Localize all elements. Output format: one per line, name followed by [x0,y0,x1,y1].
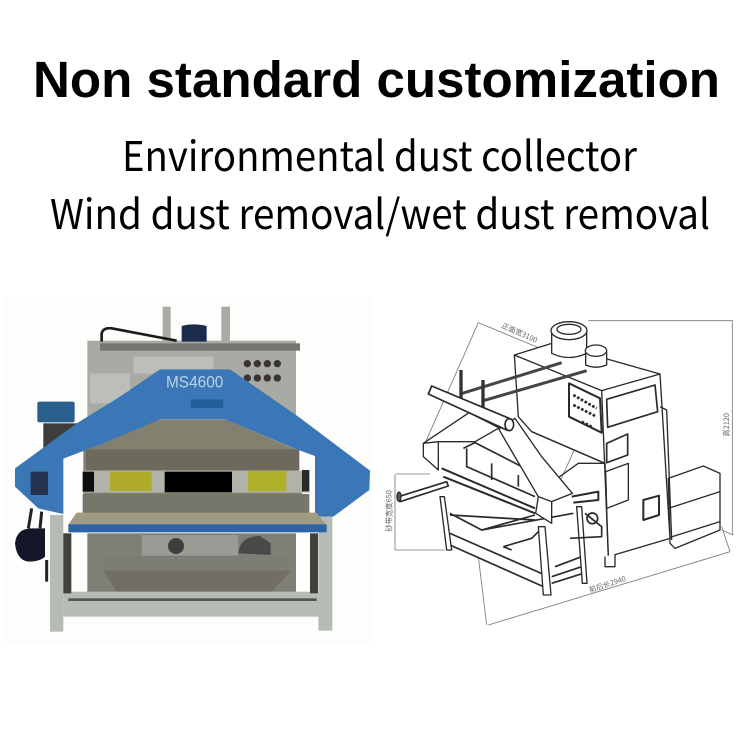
dimension labels: 正面宽3100 [500,320,539,346]
motor on left [37,402,75,422]
hopper [103,557,290,592]
inner machine body [83,420,302,513]
rear frame posts [163,307,230,343]
frame [450,513,583,587]
rear body edge [532,432,605,480]
rails [462,363,587,401]
exhaust pipes [551,322,607,367]
legs [50,515,332,632]
control buttons [244,360,281,382]
side unit [668,466,720,548]
motor at lower left [15,528,45,562]
crossbar [428,386,514,431]
panel: line drawing [384,320,733,625]
rear cabinet [87,341,296,451]
inner strip with labels [83,471,309,493]
panel: machine photo [3,297,372,643]
control box [31,472,48,495]
belt and rollers [463,443,535,497]
blue arch housing [15,369,370,517]
subtitle: line 1: Environmental dust collector [122,123,637,183]
title: Non standard customization [33,51,720,108]
cabinet doors [607,385,658,427]
dimension lines [395,321,733,625]
warning labels [110,472,152,491]
control panel [569,383,602,433]
lower cabinet [87,533,296,593]
motor on top [182,324,207,342]
subtitle: line 2: Wind dust removal/wet dust removal [50,181,710,241]
cabinet [514,343,670,557]
dimension labels: 砂带宽度650 [384,490,395,532]
dimension labels: 前后长2940 [588,573,627,596]
model label: MS4600 [166,373,223,392]
dimension labels [384,320,732,596]
arch housing [423,413,572,523]
work table [68,513,326,525]
dimension labels: 高2120 [721,413,732,437]
cable [102,328,177,342]
